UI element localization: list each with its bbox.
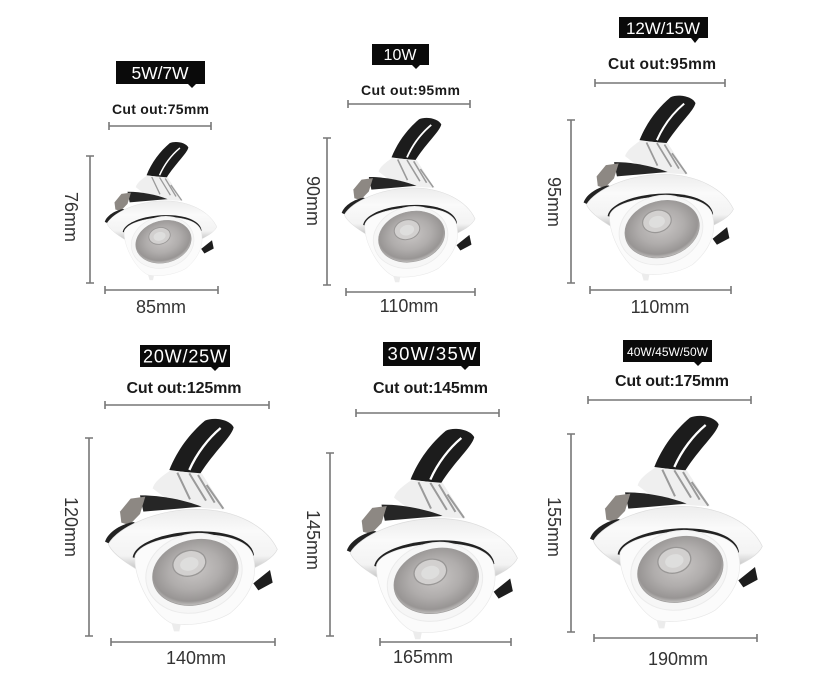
height dimension: 155mm xyxy=(544,497,564,557)
label tag: 12W/15W: 12W/15W xyxy=(626,19,700,38)
width dimension xyxy=(111,638,275,668)
cut-out width line xyxy=(105,401,269,409)
label tag: 10W xyxy=(372,44,429,69)
lamp illustration xyxy=(590,416,762,628)
label tag: 12W/15W xyxy=(619,17,708,43)
cut-out text: Cut out:145mm xyxy=(373,380,488,397)
lamp illustration xyxy=(105,419,277,631)
cut-out text: Cut out:95mm xyxy=(361,82,460,98)
cut-out width line xyxy=(348,100,470,108)
lamp illustration xyxy=(105,142,217,280)
lamp illustration xyxy=(342,118,475,282)
height dimension: 76mm xyxy=(61,192,81,242)
cut-out width line xyxy=(595,79,725,87)
width dimension xyxy=(594,634,757,669)
height dimension xyxy=(303,453,334,636)
label tag: 5W/7W: 5W/7W xyxy=(132,63,189,83)
height dimension xyxy=(544,120,575,283)
panel: 10W model xyxy=(303,44,475,316)
width dimension xyxy=(105,286,218,317)
label tag: 10W: 10W xyxy=(384,47,417,64)
cut-out width line xyxy=(109,122,211,130)
cut-out text: Cut out:125mm xyxy=(126,380,242,397)
height dimension: 95mm xyxy=(544,177,564,227)
width dimension xyxy=(590,286,731,317)
height dimension: 120mm xyxy=(61,497,81,557)
width dimension xyxy=(346,288,475,316)
width dimension: 190mm xyxy=(648,649,708,669)
width dimension: 110mm xyxy=(631,297,689,317)
width dimension: 85mm xyxy=(136,297,186,317)
panel: 12W/15W model xyxy=(544,17,733,317)
panel: 5W/7W model xyxy=(61,61,218,317)
height dimension: 145mm xyxy=(303,510,323,570)
height dimension: 90mm xyxy=(303,176,323,226)
label tag: 30W/35W: 30W/35W xyxy=(388,343,477,364)
width dimension: 165mm xyxy=(393,647,453,667)
label tag: 30W/35W xyxy=(383,342,480,370)
panel: 20W/25W model xyxy=(61,345,277,668)
cut-out text: Cut out:75mm xyxy=(112,101,209,117)
cut-out text: Cut out:95mm xyxy=(608,56,716,73)
label tag: 40W/45W/50W: 40W/45W/50W xyxy=(627,345,709,359)
panel: 30W/35W model xyxy=(303,342,517,667)
lamp illustration xyxy=(584,96,733,280)
label tag: 40W/45W/50W xyxy=(623,340,712,366)
cut-out width line xyxy=(588,396,751,404)
height dimension xyxy=(303,138,331,285)
panel: 40W/45W/50W model xyxy=(544,340,762,669)
height dimension xyxy=(544,434,575,632)
width dimension: 140mm xyxy=(166,648,226,668)
width dimension xyxy=(380,638,511,667)
label tag: 5W/7W xyxy=(116,61,205,88)
height dimension xyxy=(61,156,94,283)
cut-out width line xyxy=(356,409,499,417)
width dimension: 110mm xyxy=(380,296,438,316)
label tag: 20W/25W: 20W/25W xyxy=(143,346,227,366)
lamp illustration xyxy=(347,429,517,639)
height dimension xyxy=(61,438,93,636)
cut-out text: Cut out:175mm xyxy=(615,373,729,390)
